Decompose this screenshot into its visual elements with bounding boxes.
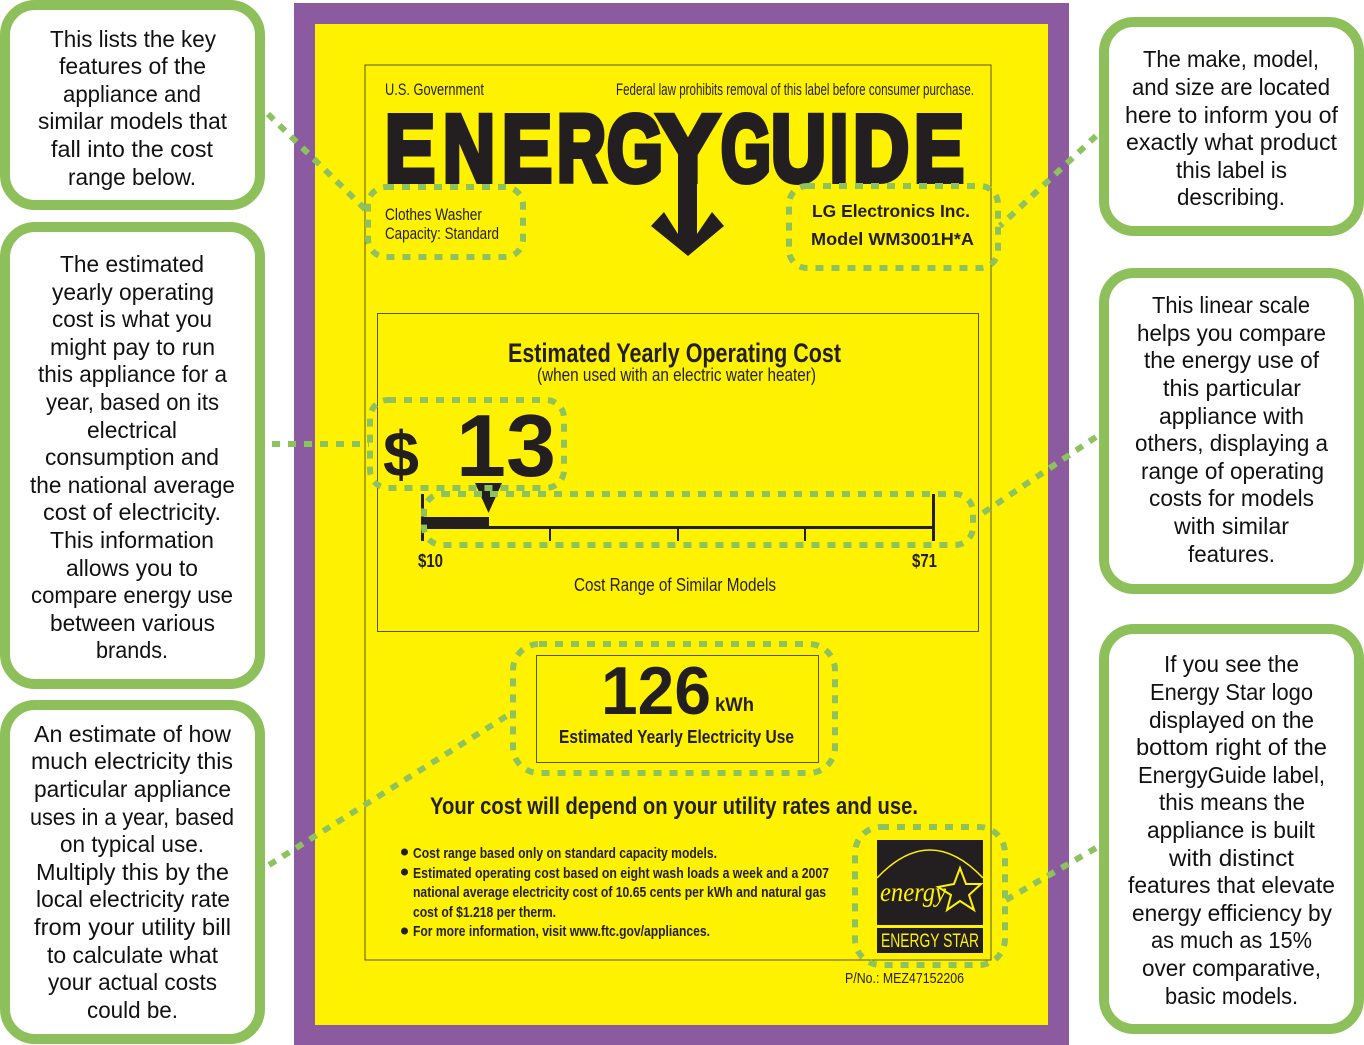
callout text (38, 26, 228, 190)
fine print bullets: For more information, visit www.ftc.gov/appliances. (413, 923, 710, 940)
callout text: fall into the cost (51, 136, 214, 162)
callout text: uses in a year, based (30, 804, 234, 830)
callout: key features (5, 5, 260, 205)
icon: Energy Star logo: ENERGY STAR (881, 931, 979, 952)
make and model: LG Electronics Inc. (812, 201, 970, 221)
cost value (383, 396, 556, 495)
callout text: might pay to run (50, 334, 215, 360)
callout text: this label is (1176, 157, 1287, 183)
callout text: This information (50, 527, 214, 553)
callout text: appliance and (63, 81, 201, 107)
callout text: exactly what product (1126, 129, 1338, 155)
EnergyGuide wordmark: G (607, 96, 663, 202)
callout text: this particular (1163, 375, 1301, 401)
callout text: This lists the key (50, 26, 216, 52)
EnergyGuide wordmark: E (914, 96, 964, 202)
panel: operating cost (378, 314, 978, 632)
EnergyGuide wordmark: N (443, 96, 495, 202)
scale labels: $10 (418, 551, 443, 571)
scale caption: Cost Range of Similar Models (574, 575, 776, 595)
callout text: year, based on its (46, 389, 219, 415)
callout text: consumption and (45, 444, 219, 470)
fine print bullets (401, 845, 829, 940)
callout text: helps you compare (1137, 320, 1326, 346)
label outer frame (365, 65, 991, 960)
callout text: and size are located (1132, 74, 1330, 100)
fine print bullets: cost of $1.218 per therm. (413, 904, 556, 921)
callout text (1125, 46, 1339, 210)
callout text: this appliance for a (38, 361, 227, 387)
callout: yearly operating cost (5, 227, 260, 684)
callout text: appliance with (1159, 403, 1304, 429)
make and model (811, 201, 974, 249)
callout text: between various (50, 610, 215, 636)
callout text: could be. (87, 997, 178, 1023)
callout text: yearly operating (52, 279, 214, 305)
callout text: features of the (59, 53, 206, 79)
header notes (385, 81, 974, 99)
callout text: much electricity this (31, 748, 233, 774)
callout text: brands. (96, 637, 168, 663)
callout text: the national average (30, 472, 235, 498)
EnergyGuide wordmark (385, 96, 964, 202)
callout text: The estimated (60, 251, 204, 277)
make and model: Model WM3001H*A (811, 229, 974, 249)
header notes: Federal law prohibits removal of this label before consumer purchase. (616, 81, 974, 99)
cost value: $ (383, 418, 419, 490)
callout text: with similar (1173, 513, 1289, 539)
callout text: as much as 15% (1151, 927, 1312, 953)
callout text: compare energy use (31, 582, 233, 608)
callout text: An estimate of how (34, 721, 231, 747)
EnergyGuide wordmark: U (771, 96, 826, 202)
operating cost frame (378, 314, 978, 632)
icon: Energy Star logo (877, 840, 983, 953)
EnergyGuide wordmark: R (557, 96, 606, 202)
kWh value: 126 (601, 653, 711, 729)
cost value: 13 (456, 396, 556, 495)
callout text: from your utility bill (34, 914, 231, 940)
EnergyGuide wordmark: G (721, 96, 771, 202)
callout text: appliance is built (1147, 817, 1316, 843)
callout frame (5, 5, 260, 205)
callout text: cost of electricity. (43, 499, 221, 525)
callout text: If you see the (1164, 651, 1299, 677)
callout frame (1104, 629, 1359, 1029)
callout text: range below. (68, 164, 196, 190)
panel: electricity use (536, 653, 818, 762)
callout: linear scale (1104, 273, 1359, 589)
callout text: electrical (87, 417, 177, 443)
fine print bullets: Estimated operating cost based on eight wash loads a week and a 2007 (413, 865, 829, 882)
callout: make and model (1104, 22, 1359, 231)
callout frame (1104, 22, 1359, 231)
callout text: allows you to (66, 555, 198, 581)
yellow label background (315, 24, 1048, 1025)
callout text: basic models. (1165, 983, 1298, 1009)
callout text: features that elevate (1128, 872, 1335, 898)
callout text: with distinct (1168, 845, 1295, 871)
callout text: to calculate what (47, 942, 219, 968)
kWh unit: kWh (715, 695, 754, 716)
callout text: on typical use. (60, 831, 204, 857)
scale labels: $71 (912, 551, 937, 571)
callout text (1135, 292, 1328, 567)
callout text: this means the (1159, 789, 1305, 815)
callout text: displayed on the (1149, 707, 1314, 733)
callout text: energy efficiency by (1132, 900, 1332, 926)
callout text: features. (1188, 541, 1275, 567)
appliance type: Capacity: Standard (385, 225, 499, 243)
purple label border (294, 3, 1069, 1045)
scale labels (418, 551, 937, 571)
header notes: U.S. Government (385, 81, 484, 99)
callout text: The make, model, (1143, 46, 1319, 72)
callout text: particular appliance (34, 776, 231, 802)
callout text: EnergyGuide label, (1138, 762, 1325, 788)
callout text: Multiply this by the (36, 859, 229, 885)
icon: Energy Star logo: energy (880, 877, 946, 907)
callout text: costs for models (1149, 485, 1314, 511)
callout text: local electricity rate (36, 886, 230, 912)
fine print bullets: national average electricity cost of 10.65 cents per kWh and natural gas (413, 884, 826, 901)
panel: EnergyGuide label (294, 3, 1069, 1045)
electricity use caption: Estimated Yearly Electricity Use (559, 727, 794, 747)
callout text: the energy use of (1144, 347, 1320, 373)
EnergyGuide wordmark: E (502, 96, 552, 202)
EnergyGuide wordmark: Y (657, 96, 719, 202)
callout text: bottom right of the (1136, 734, 1327, 760)
callout text: over comparative, (1142, 955, 1321, 981)
EnergyGuide wordmark: I (830, 96, 848, 202)
callout text: cost is what you (52, 306, 212, 332)
electricity use frame (536, 656, 818, 762)
operating cost heading: Estimated Yearly Operating Cost (508, 338, 841, 368)
callout frame (1104, 273, 1359, 589)
EnergyGuide wordmark: E (385, 96, 435, 202)
appliance type: Clothes Washer (385, 206, 482, 224)
EnergyGuide wordmark: D (853, 96, 909, 202)
callout text: others, displaying a (1135, 430, 1328, 456)
callout text: range of operating (1141, 458, 1324, 484)
callout frame (5, 705, 260, 1039)
fine print bullets: Cost range based only on standard capacity models. (413, 845, 717, 862)
callout frame (5, 227, 260, 684)
part number: P/No.: MEZ47152206 (845, 970, 964, 987)
appliance type (385, 206, 499, 243)
cost statement: Your cost will depend on your utility rates and use. (430, 793, 918, 820)
icon: wordmark down arrow (651, 150, 724, 256)
highlight outlines and connectors (268, 114, 1096, 965)
callout text (30, 251, 235, 663)
callout: electricity estimate (5, 705, 260, 1039)
cost range scale (421, 483, 935, 541)
callout text: Energy Star logo (1150, 679, 1313, 705)
callout text: describing. (1177, 184, 1285, 210)
callout text: This linear scale (1152, 292, 1310, 318)
callout text (1128, 651, 1335, 1009)
callout text: here to inform you of (1125, 102, 1339, 128)
callout: Energy Star (1104, 629, 1359, 1029)
operating cost subheading: (when used with an electric water heater) (537, 365, 816, 385)
callout text: similar models that (38, 108, 228, 134)
callout text (30, 721, 234, 1023)
callout text: your actual costs (48, 969, 217, 995)
